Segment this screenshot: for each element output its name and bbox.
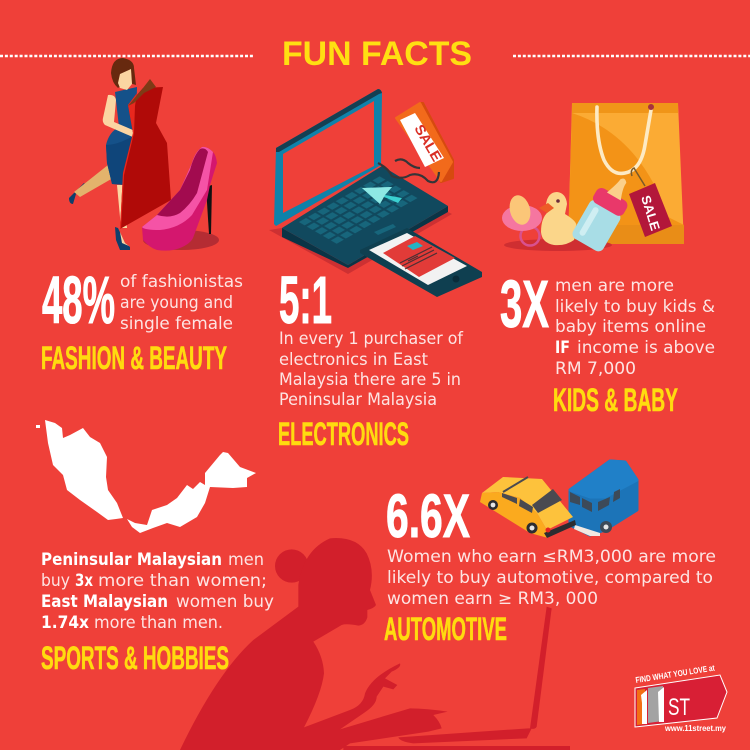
text: kids and baby buyers: IF [555, 338, 570, 357]
text: fashionistas: single female [120, 314, 233, 333]
panel: kids and baby [500, 103, 715, 418]
icon: shopping bag and baby items: SALE [638, 193, 663, 233]
icon: laptop with sale tag and phone: SALE [411, 122, 445, 164]
icon: shopping bag and baby items [502, 103, 684, 254]
text: peninsular vs east Malaysia: 1.74x [41, 613, 89, 632]
text: peninsular vs east Malaysia: buy [41, 571, 70, 590]
panel: sports and hobbies [36, 420, 274, 676]
text: kids and baby buyers: RM 7,000 [555, 359, 636, 378]
heading: electronics: ELECTRONICS [278, 416, 409, 452]
heading: automotive: AUTOMOTIVE [384, 611, 507, 647]
logo: 11street: www.11street.my [664, 723, 726, 733]
logo: 11street: ST [668, 694, 690, 721]
heading: fashion and beauty: FASHION & BEAUTY [41, 340, 227, 376]
icon: cars [480, 461, 637, 538]
stat: 48%: 48% [42, 263, 115, 338]
stat: 5:1: 5:1 [279, 263, 332, 338]
panel: automotive [384, 461, 716, 647]
text: kids and baby buyers: men are more [555, 276, 674, 295]
logo: 11street: FIND WHAT YOU LOVE at [635, 663, 715, 685]
heading: sports and hobbies: SPORTS & HOBBIES [41, 640, 229, 676]
text: fashionistas: of fashionistas [120, 272, 243, 291]
map: Malaysia [36, 420, 256, 533]
text: kids and baby buyers: likely to buy kids & [555, 297, 715, 316]
text: peninsular vs east Malaysia: Peninsular Malaysian [41, 550, 222, 569]
text: peninsular vs east Malaysia: men [228, 550, 264, 569]
text: kids and baby buyers: baby items online [555, 317, 706, 336]
icon: woman with dress and high heel [69, 58, 219, 251]
stat: 6.6X: 6.6X [386, 482, 470, 550]
text: electronics purchasers: Peninsular Malaysia [279, 390, 437, 409]
text: peninsular vs east Malaysia: East Malaysian [41, 592, 168, 611]
panel: fashion and beauty [41, 58, 243, 376]
text: peninsular vs east Malaysia: more than men. [94, 613, 223, 632]
text: electronics purchasers: electronics in East [279, 350, 429, 369]
text: women automotive buyers: women earn ≥ RM3, 000 [387, 589, 598, 608]
text: peninsular vs east Malaysia: more than women; [98, 571, 267, 590]
logo: 11street [635, 663, 727, 733]
icon: laptop with sale tag and phone [269, 89, 482, 297]
text: women automotive buyers: Women who earn ≤RM3,000 are more [387, 547, 716, 566]
text: peninsular vs east Malaysia: women buy [176, 592, 274, 611]
silhouette: woman at laptop [180, 538, 570, 750]
stat: 3X: 3X [500, 267, 549, 342]
panel: electronics [269, 89, 482, 452]
title: FUN FACTS [282, 35, 472, 73]
text: electronics purchasers: Malaysia there are 5 in [279, 370, 461, 389]
text: women automotive buyers: likely to buy automotive, compared to [387, 568, 713, 587]
text: kids and baby buyers: income is above [577, 338, 715, 357]
text: fashionistas: are young and [120, 293, 233, 312]
text: electronics purchasers: In every 1 purchaser of [279, 329, 464, 348]
text: peninsular vs east Malaysia: 3x [75, 571, 93, 590]
